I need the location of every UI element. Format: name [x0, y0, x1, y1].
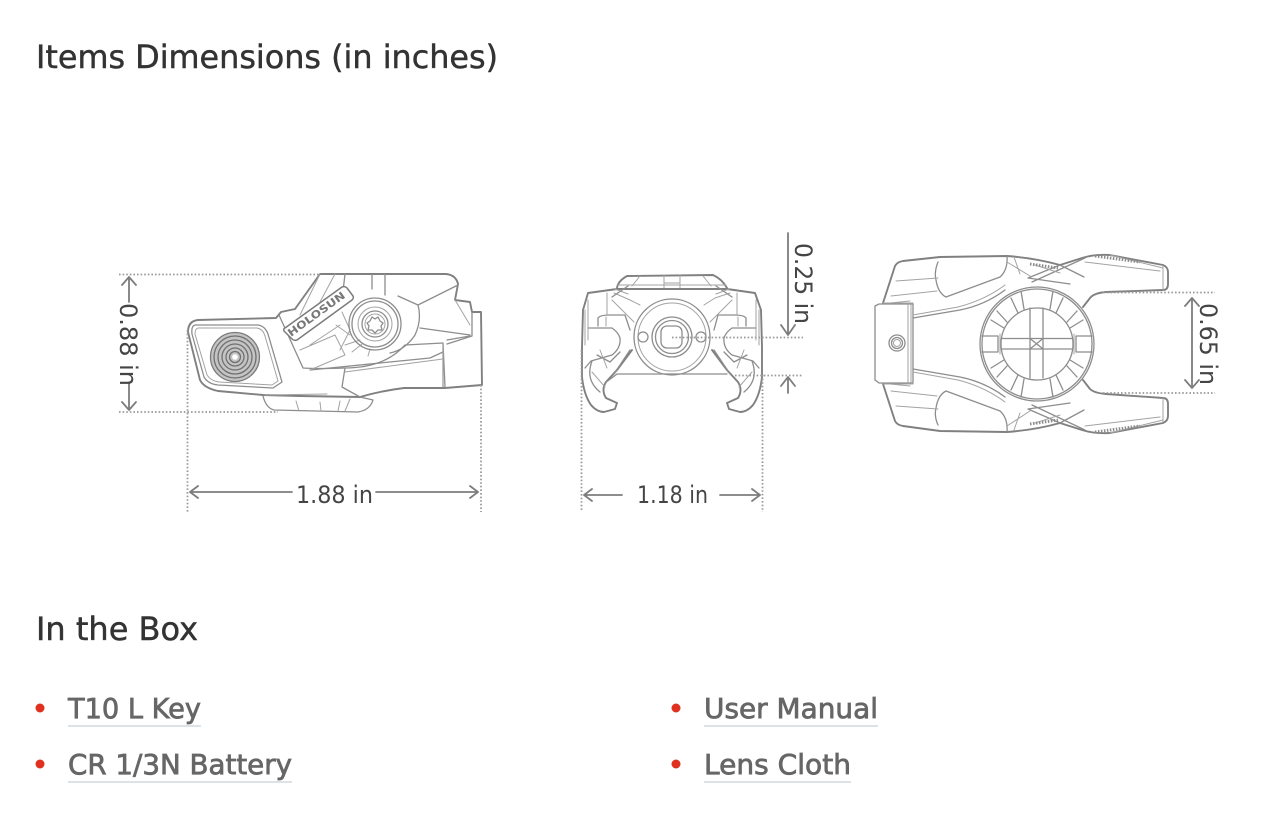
icon: top view outline — [875, 255, 1168, 433]
label: 1.18 in: 1.18 in — [637, 481, 708, 509]
title: Items Dimensions: Items Dimensions (in inches) — [36, 38, 498, 76]
icon: HOLOSUN plate — [284, 287, 353, 340]
dotted guides: top view — [1103, 292, 1215, 393]
icon: side view outline — [188, 274, 482, 412]
panel: side view with dimensions — [114, 274, 482, 512]
label: 1.88 in: 1.88 in — [296, 481, 373, 509]
dotted guides: front view — [582, 338, 803, 512]
list item: User Manual: User Manual — [704, 692, 878, 725]
dotted guides: side view — [119, 274, 481, 512]
list item: Lens Cloth: Lens Cloth — [704, 748, 851, 781]
list item: CR 1/3N Battery: CR 1/3N Battery — [68, 748, 292, 781]
panel: top view with dimensions — [875, 255, 1222, 433]
list item: T10 L Key: T10 L Key — [67, 692, 201, 725]
icon: lens circle — [210, 332, 260, 382]
label: 0.25 in: 0.25 in — [789, 243, 817, 324]
icon: front view outline — [582, 275, 762, 412]
arrow: 1.88 in width — [190, 486, 478, 498]
arrow: 0.65 in — [1185, 298, 1199, 388]
icon: HOLOSUN plate: HOLOSUN — [286, 290, 348, 339]
arrow: 1.18 in width — [584, 489, 760, 501]
arrow: 0.25 in offset — [781, 233, 795, 393]
panel: front view with dimensions — [582, 233, 817, 512]
label: 0.88 in: 0.88 in — [114, 303, 142, 386]
label: 0.65 in: 0.65 in — [1194, 303, 1222, 385]
arrow: 0.88 in height — [122, 277, 136, 410]
icon: front lens — [634, 299, 710, 375]
icon: adjustment knob — [349, 298, 401, 350]
icon: mounting screw — [889, 335, 905, 351]
heading: In the Box: In the Box — [36, 610, 198, 648]
icon: top view dial — [980, 287, 1094, 401]
list: box contents — [36, 692, 878, 783]
